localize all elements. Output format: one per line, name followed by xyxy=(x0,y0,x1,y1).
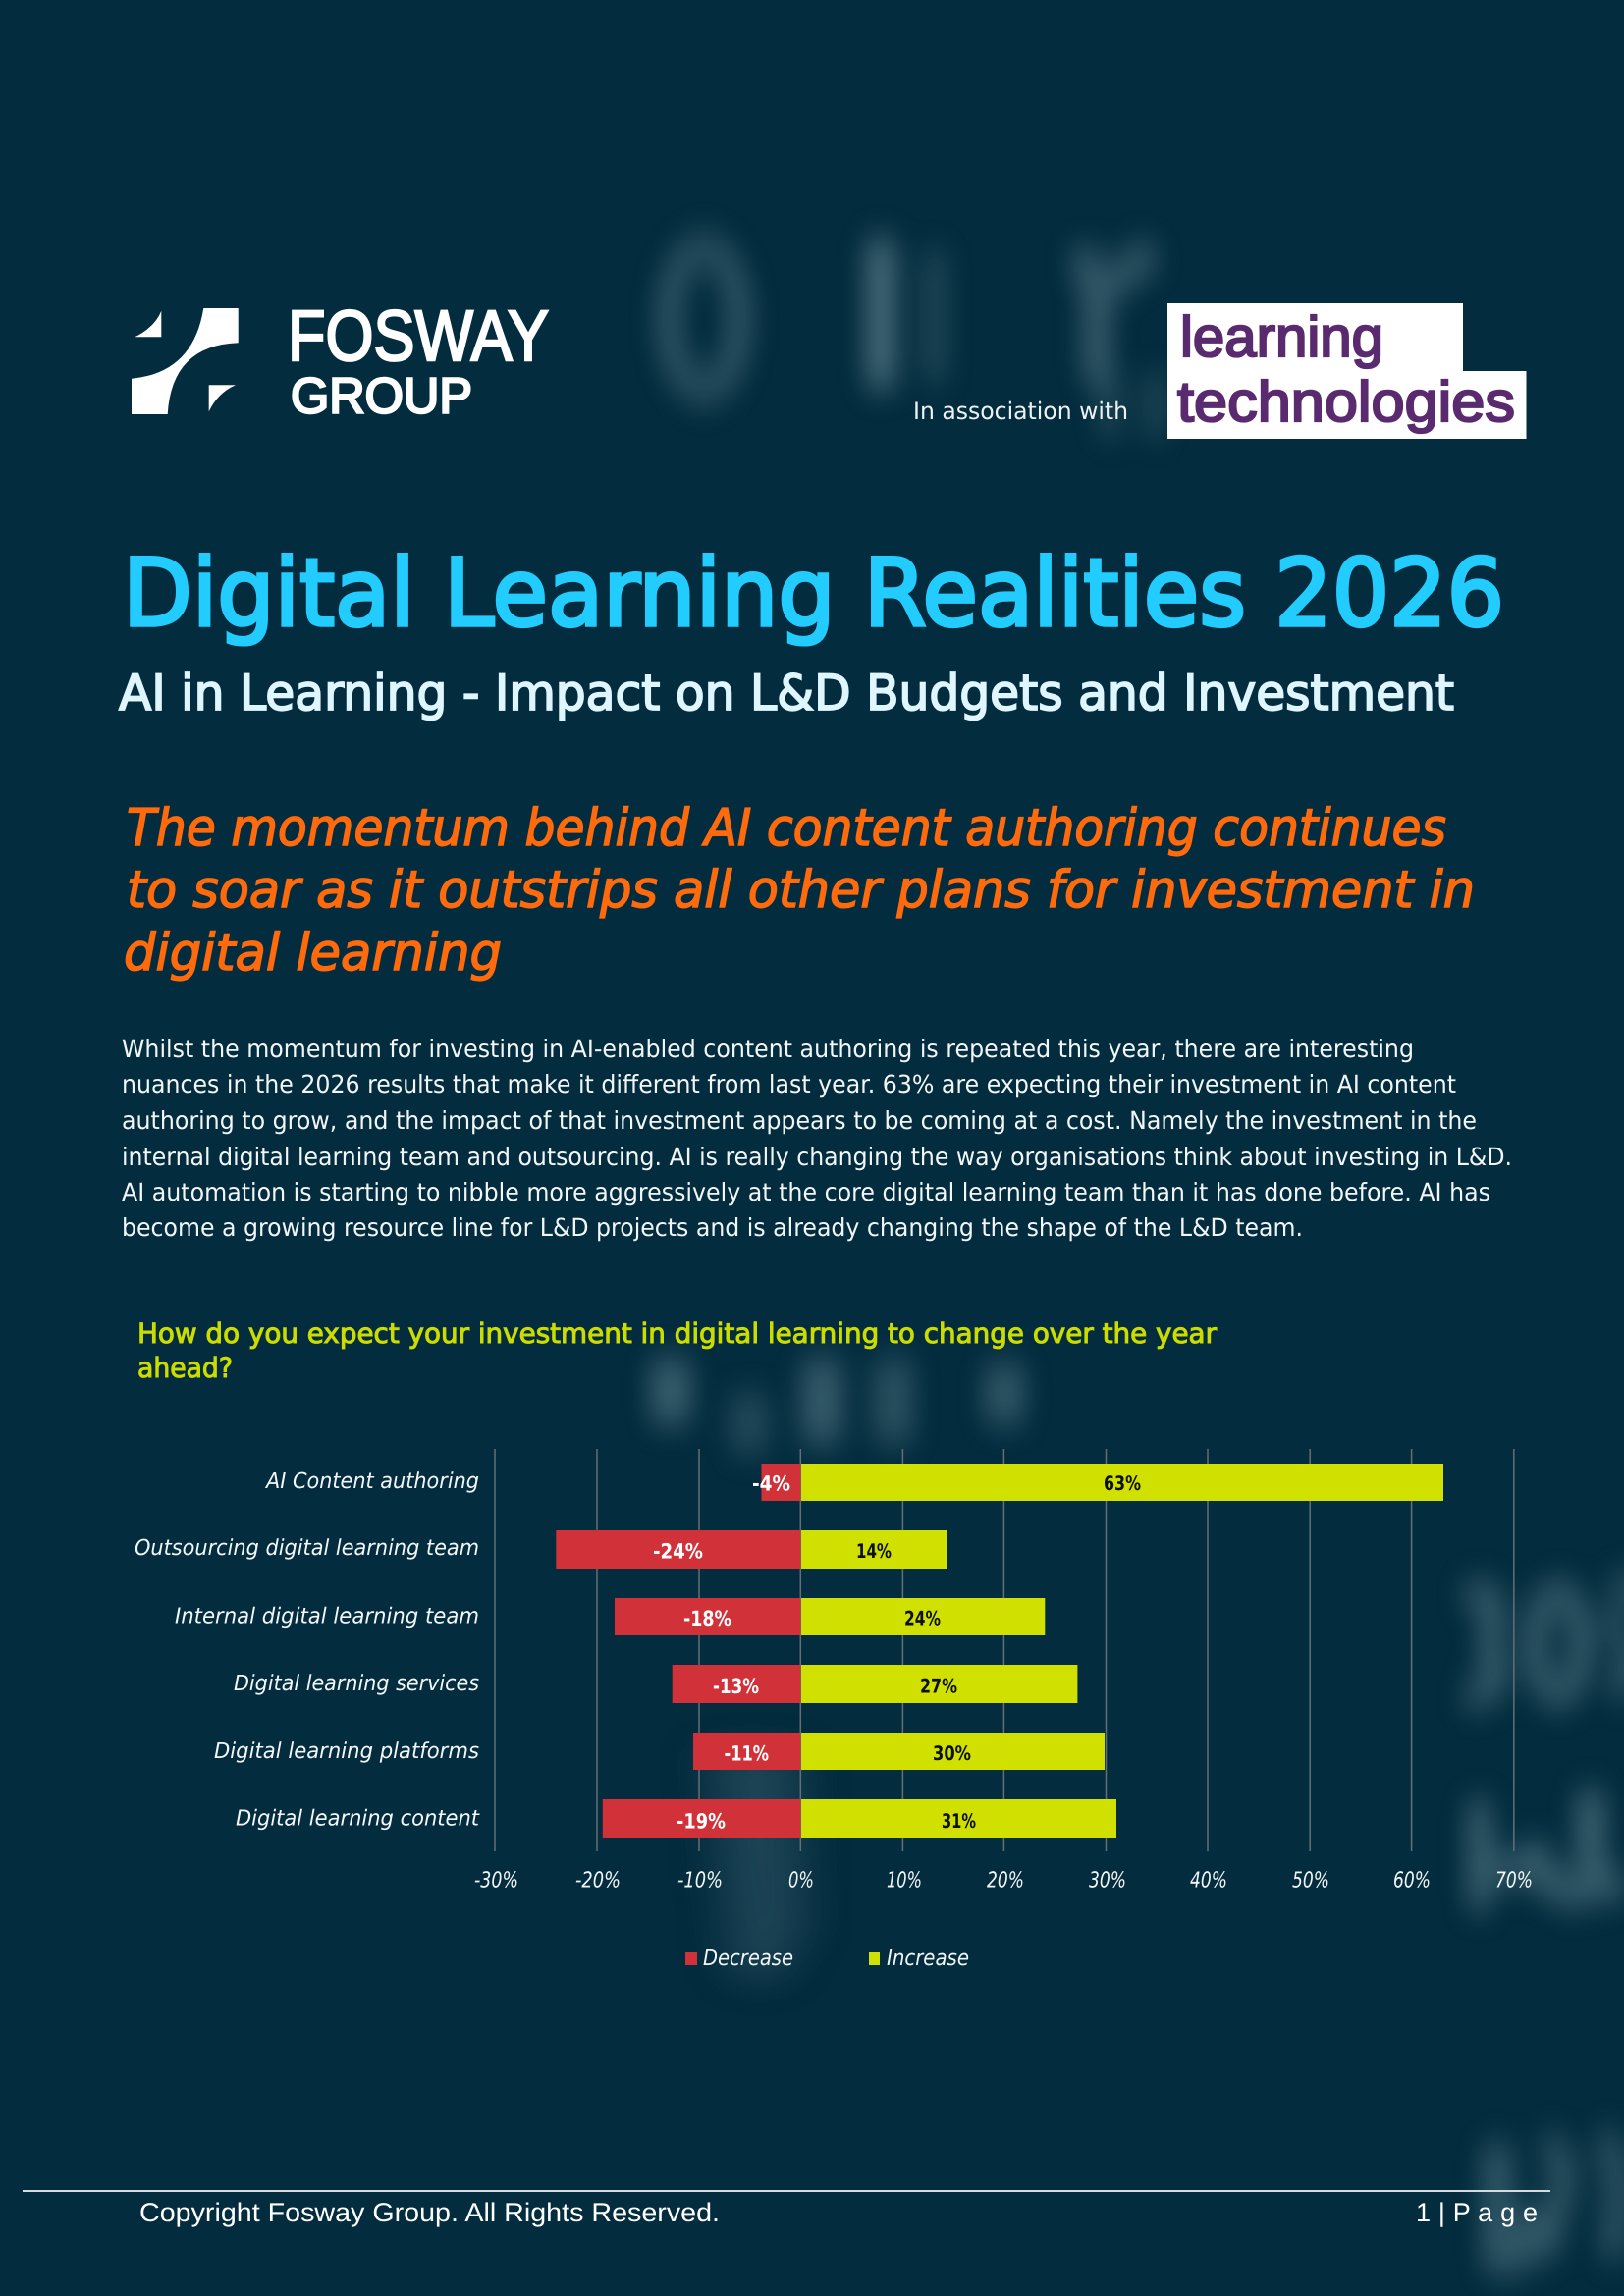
body text block: Whilst the momentum for investing in AI-enabled content authoring is repeated this year, there are interesting xyxy=(122,1035,1414,1063)
decrease value labels: -18% xyxy=(683,1607,731,1630)
category labels: Digital learning services xyxy=(234,1672,479,1696)
association label: In association with xyxy=(913,398,1128,425)
title: Digital Learning Realities 2026 xyxy=(123,540,1504,648)
increase value labels: 24% xyxy=(904,1606,941,1629)
icon: Fosway mark xyxy=(132,308,239,414)
logo wordmark: GROUP xyxy=(291,367,472,424)
logo: Fosway Group xyxy=(132,296,549,424)
x axis labels xyxy=(474,1869,1533,1893)
x axis labels: 20% xyxy=(987,1869,1024,1893)
logo: learning technologies: learning xyxy=(1180,305,1383,369)
body text block: become a growing resource line for L&D projects and is already changing the shape of the L&D team. xyxy=(122,1213,1303,1242)
headline callout xyxy=(124,799,1475,983)
body text block: nuances in the 2026 results that make it different from last year. 63% are expecting their investment in AI content xyxy=(122,1070,1456,1098)
body text block xyxy=(122,1035,1512,1242)
category labels: Digital learning platforms xyxy=(214,1739,479,1764)
increase value labels: 27% xyxy=(920,1675,957,1698)
body text block: authoring to grow, and the impact of that investment appears to be coming at a cost. Namely the investment in the xyxy=(122,1106,1477,1135)
increase value labels: 30% xyxy=(933,1741,971,1765)
subtitle: AI in Learning - Impact on L&D Budgets and Investment xyxy=(119,665,1454,721)
decrease value labels: -11% xyxy=(725,1741,769,1765)
category labels: AI Content authoring xyxy=(264,1469,479,1494)
logo wordmark: FOSWAY xyxy=(288,296,549,376)
x axis labels: 0% xyxy=(788,1869,814,1893)
category labels: Outsourcing digital learning team xyxy=(135,1536,479,1561)
x axis labels: 50% xyxy=(1292,1869,1329,1893)
headline callout: digital learning xyxy=(124,924,502,983)
bar chart xyxy=(135,1449,1533,1971)
increase value labels: 14% xyxy=(856,1539,892,1563)
legend: Increase xyxy=(887,1947,969,1971)
increase value labels xyxy=(856,1471,1141,1833)
x axis labels: 10% xyxy=(887,1869,922,1893)
category labels xyxy=(135,1469,480,1832)
logo: learning technologies xyxy=(1167,303,1526,439)
page number: 1 | P a g e xyxy=(1416,2198,1538,2227)
decrease bars xyxy=(556,1464,800,1838)
category labels: Internal digital learning team xyxy=(175,1604,479,1629)
logo wordmark xyxy=(288,296,549,424)
chart question heading: ahead? xyxy=(137,1352,233,1384)
body text block: AI automation is starting to nibble more aggressively at the core digital learning team than it has done before. AI has xyxy=(122,1178,1490,1206)
x axis labels: 30% xyxy=(1089,1869,1126,1893)
decrease value labels: -24% xyxy=(653,1539,703,1563)
x axis labels: 60% xyxy=(1393,1869,1431,1893)
increase value labels: 31% xyxy=(942,1809,976,1833)
increase bars xyxy=(801,1464,1443,1838)
headline callout: to soar as it outstrips all other plans for investment in xyxy=(127,861,1475,920)
footer xyxy=(23,2190,1550,2227)
copyright: Copyright Fosway Group. All Rights Reserved. xyxy=(139,2198,720,2227)
x axis labels: -30% xyxy=(474,1869,518,1893)
body text block: internal digital learning team and outsourcing. AI is really changing the way organisations think about investing in L&D. xyxy=(122,1143,1512,1171)
x axis labels: -10% xyxy=(677,1869,723,1893)
chart question heading xyxy=(137,1317,1217,1384)
x axis labels: -20% xyxy=(575,1869,621,1893)
decrease value labels: -19% xyxy=(677,1810,726,1834)
x axis labels: 70% xyxy=(1495,1869,1533,1893)
legend: Decrease xyxy=(703,1947,793,1971)
headline callout: The momentum behind AI content authoring continues xyxy=(127,799,1446,858)
increase value labels: 63% xyxy=(1104,1471,1141,1495)
legend xyxy=(685,1947,969,1971)
logo: learning technologies: technologies xyxy=(1177,370,1515,434)
x axis labels: 40% xyxy=(1190,1869,1227,1893)
decrease value labels xyxy=(653,1472,790,1834)
category labels: Digital learning content xyxy=(236,1806,480,1832)
chart question heading: How do you expect your investment in digital learning to change over the year xyxy=(137,1317,1217,1350)
decrease value labels: -13% xyxy=(713,1675,759,1698)
decrease value labels: -4% xyxy=(752,1472,790,1496)
